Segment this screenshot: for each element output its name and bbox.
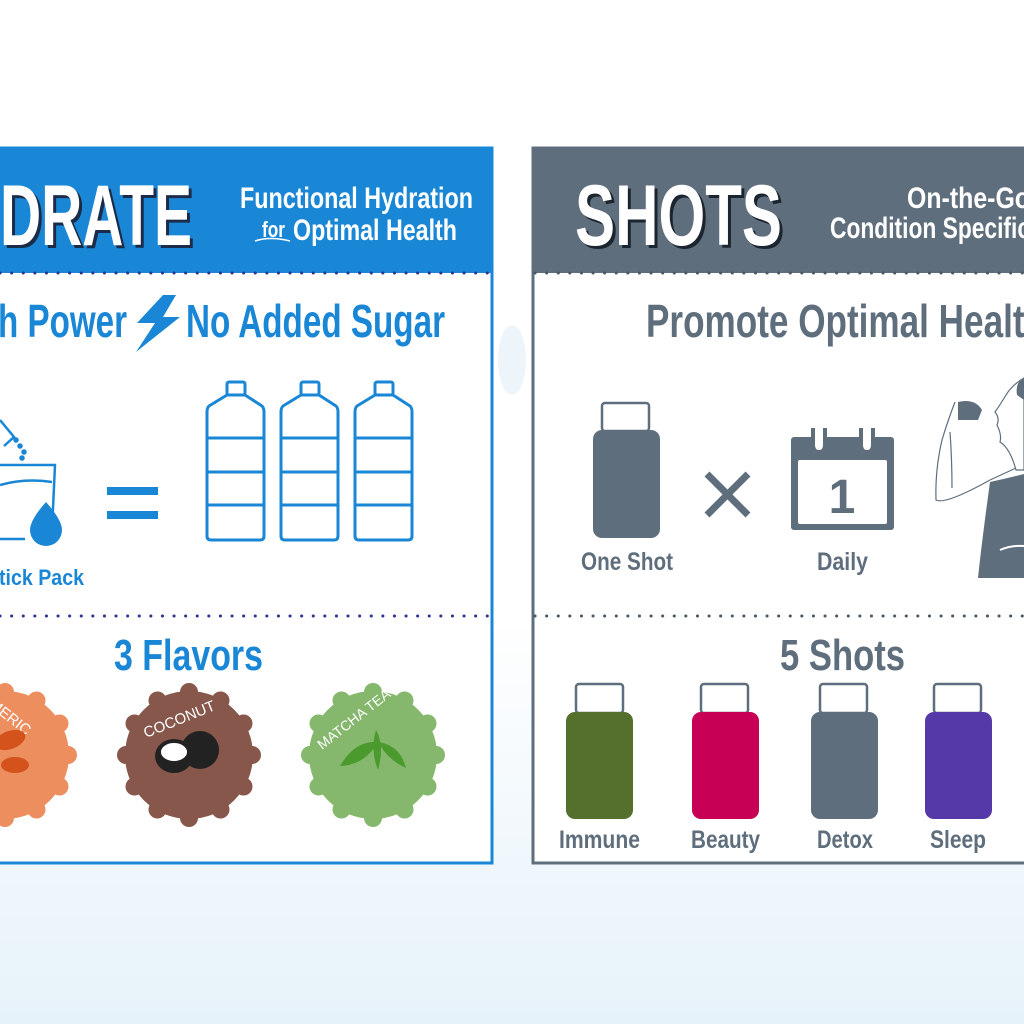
subtitle — [830, 182, 1024, 245]
header: hydrate — [0, 148, 492, 273]
icon: woman drinking — [936, 378, 1024, 578]
badge: matcha tea: MATCHA TEA — [314, 685, 394, 752]
water splash — [498, 325, 526, 395]
badge: matcha tea — [301, 683, 445, 827]
shot: beauty: Beauty — [691, 826, 760, 854]
heading: power no added sugar: No Added Sugar — [186, 295, 445, 347]
heading: power no added sugar: h Power — [0, 295, 127, 347]
badge: coconut — [117, 683, 261, 827]
heading: 3 flavors: 3 Flavors — [114, 631, 263, 680]
icon: water bottles — [207, 382, 412, 540]
shot: detox — [811, 684, 878, 854]
subtitle: Optimal Health — [293, 214, 457, 247]
shot: sleep — [925, 684, 992, 854]
heading: power no added sugar — [0, 295, 445, 352]
header: shots — [533, 148, 1024, 273]
shot: immune: Immune — [559, 826, 640, 854]
panel: hydrate — [0, 148, 492, 863]
icon: one shot bottle — [593, 403, 660, 538]
badge: coconut: COCONUT — [141, 698, 218, 742]
subtitle: for — [262, 217, 285, 242]
icon: stick pack in cup — [0, 420, 62, 546]
shot: sleep: Sleep — [930, 826, 986, 854]
heading: 5 shots: 5 Shots — [780, 631, 905, 680]
shot: immune — [559, 684, 640, 854]
icon: equals — [107, 487, 158, 519]
label: stick pack: tick Pack — [0, 565, 85, 590]
header: hydrate: DRATE — [0, 168, 192, 264]
badge: turmeric — [0, 683, 77, 827]
subtitle: Functional Hydration — [240, 182, 473, 215]
shot: detox: Detox — [817, 826, 873, 854]
icon: calendar: 1 — [829, 471, 855, 524]
shot: beauty — [691, 684, 760, 854]
label: daily: Daily — [817, 548, 868, 576]
icon: lightning bolt — [136, 295, 180, 352]
icon: calendar — [791, 428, 894, 530]
panel: shots — [533, 148, 1024, 863]
header: shots: SHOTS — [575, 168, 782, 264]
label: one shot: One Shot — [581, 548, 674, 576]
subtitle — [240, 182, 473, 247]
title: DRATE: DRATE — [3, 171, 195, 267]
title: SHOTS: SHOTS — [578, 171, 785, 267]
icon: times — [707, 474, 748, 515]
